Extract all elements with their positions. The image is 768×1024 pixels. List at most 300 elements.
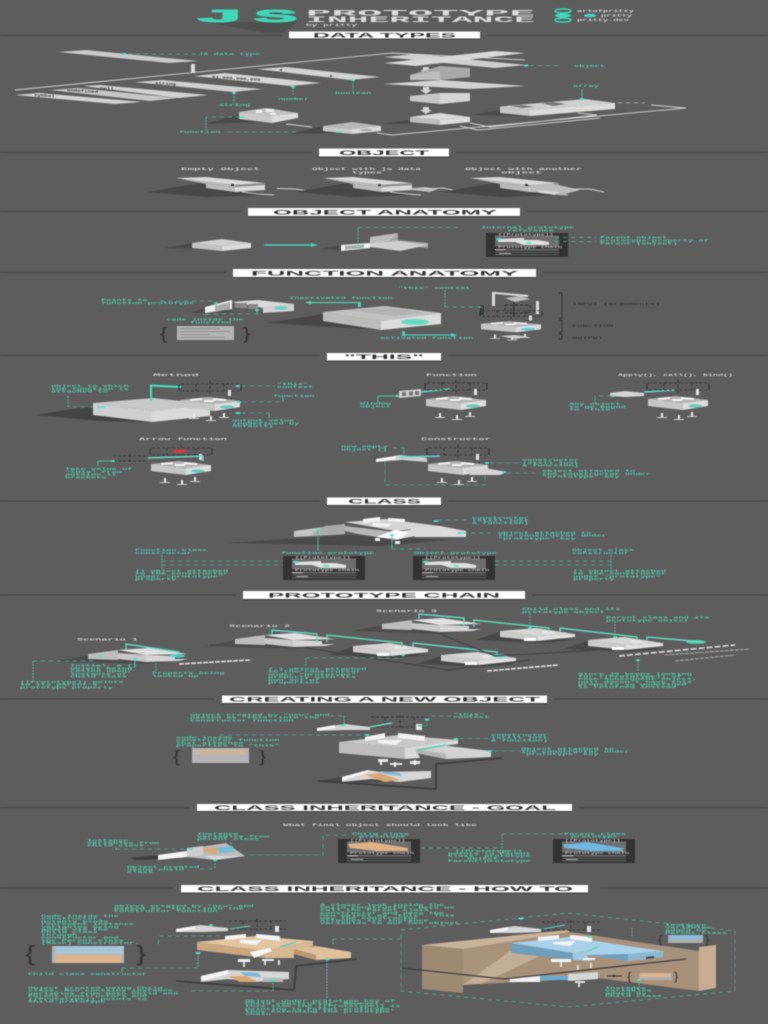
label: points to prototype: function.prototype bbox=[101, 301, 194, 305]
arrow bbox=[264, 243, 318, 247]
section heading: class inheritance how to bbox=[0, 885, 768, 893]
function box bbox=[179, 108, 335, 134]
labels: object attached to bbox=[542, 469, 635, 473]
output squiggle bbox=[487, 665, 558, 671]
social handles bbox=[555, 9, 634, 22]
labels: constructor bbox=[522, 458, 579, 462]
class diagram bbox=[225, 517, 466, 551]
label: code inside constructor: Code inside the bbox=[41, 914, 119, 918]
labels: the constructor under bbox=[542, 472, 651, 476]
label: object created using child: [[Prototype]] points to bbox=[28, 997, 147, 1001]
dark connector bbox=[402, 959, 686, 979]
label: take value bbox=[65, 460, 132, 479]
labels: "prototype" key bbox=[542, 474, 620, 479]
panel: parent prototype: Prototype chain bbox=[565, 851, 629, 855]
label: object class constructor: {} object attached bbox=[573, 569, 666, 573]
label: constructor: constructor bbox=[491, 733, 548, 737]
labels: called upon, bbox=[70, 669, 132, 673]
teal link bbox=[151, 386, 181, 401]
labels bbox=[522, 607, 710, 689]
label: object under prototype key: Child constructor. However, bbox=[245, 1001, 385, 1006]
label: closer look: call the Parent class' bbox=[320, 908, 434, 912]
labels: for [[Prototype]] of bbox=[578, 674, 682, 679]
label: object class constructor: under "prototype" bbox=[573, 574, 661, 578]
panel: object.prototype bbox=[413, 551, 497, 580]
label: take value: Take value of bbox=[65, 467, 132, 471]
label: {.} object attached bbox=[268, 667, 366, 671]
labels: default) bbox=[232, 424, 273, 428]
panel: this constructor bbox=[341, 437, 651, 485]
panel: object.prototype: Object.prototype bbox=[414, 551, 497, 555]
ground line bbox=[360, 630, 651, 656]
exploded function view bbox=[480, 292, 542, 340]
section heading: class inheritance how to: CLASS INHERITANCE - HOW TO bbox=[197, 886, 573, 893]
label: parent object bbox=[555, 235, 709, 246]
teal link bbox=[126, 644, 179, 655]
title: inheritance: INHERITANCE bbox=[306, 15, 535, 25]
label: parent instance variables: Instance bbox=[197, 832, 238, 836]
label: code inside constructor: notably binds bbox=[41, 919, 108, 923]
labels: child class bbox=[70, 674, 127, 679]
label: child instance variables: child class bbox=[87, 843, 144, 848]
section heading: object anatomy: OBJECT ANATOMY bbox=[273, 209, 499, 216]
label: object created using child: class. Now contains instance bbox=[28, 988, 173, 993]
code panel: } bbox=[136, 941, 146, 966]
labels: to its parent's bbox=[20, 682, 98, 687]
panel: creating a new object bbox=[173, 712, 630, 789]
label: activated function bbox=[380, 331, 473, 340]
label: code inside constructor: represent instance bbox=[41, 922, 134, 926]
label: any object: to "this" bbox=[569, 407, 616, 412]
panel: object.prototype: [[Prototype]] bbox=[425, 555, 481, 560]
array: array bbox=[573, 84, 599, 88]
labels: Initial, a {} bbox=[70, 663, 137, 668]
object and frame bbox=[317, 715, 430, 731]
plate: boolean bbox=[257, 67, 380, 95]
label: constructor: (still just bbox=[472, 518, 529, 523]
label: constructor: a function) bbox=[491, 738, 548, 742]
big object box bbox=[35, 398, 210, 422]
labels: output value bbox=[232, 418, 294, 423]
code panel: that attaches bbox=[176, 741, 243, 745]
panel: this apply call bind bbox=[569, 373, 733, 420]
panel: this function: Function bbox=[426, 373, 477, 378]
label: object attached: the constructor under bbox=[521, 749, 630, 754]
resulting object bbox=[316, 770, 431, 783]
section heading: class inheritance goal bbox=[0, 804, 768, 812]
label: object created: class bbox=[127, 870, 153, 874]
plate: number: $1,000,000,000 bbox=[212, 75, 260, 83]
label: object created bbox=[190, 713, 344, 724]
child code panel: added by bbox=[605, 991, 646, 995]
label: function class constructor bbox=[135, 548, 283, 581]
label: take value: outside it bbox=[65, 472, 117, 477]
label: object created bbox=[127, 860, 215, 874]
label: this context: "this" context bbox=[398, 286, 471, 290]
label: object attached: the constructor under bbox=[498, 533, 607, 538]
object with another object bbox=[441, 167, 604, 197]
panel: function.prototype: function.prototype bbox=[281, 551, 374, 555]
output squiggle bbox=[619, 645, 735, 656]
section heading: object bbox=[0, 148, 768, 157]
function box: function bbox=[179, 130, 220, 134]
label: object created using child: Child.prototype bbox=[28, 999, 106, 1004]
title: JS: S bbox=[254, 6, 297, 26]
panel: parent prototype: prototype bbox=[571, 834, 618, 839]
label: constructor: (still just bbox=[491, 735, 548, 740]
label: closer look: attaches its instance bbox=[320, 918, 429, 923]
label: any object: to be bound bbox=[569, 405, 626, 409]
label: function class constructor: constructor bbox=[135, 551, 192, 555]
labels: (undefined by bbox=[232, 421, 299, 425]
labels bbox=[20, 655, 225, 689]
label: code inside constructor: through bbox=[41, 933, 77, 937]
plate: boolean: boolean bbox=[335, 91, 371, 95]
resulting object bbox=[510, 972, 598, 987]
window object bbox=[399, 389, 421, 398]
label: under "prototype" bbox=[268, 672, 356, 676]
label: internal prototype reference: reference bbox=[507, 228, 554, 232]
label: closer look: way the constructor bbox=[320, 916, 418, 920]
section heading: class inheritance goal: CLASS INHERITANCE - GOAL bbox=[214, 805, 556, 812]
labels: context bbox=[277, 385, 313, 389]
social handles: artofpritty bbox=[577, 9, 634, 13]
labels: Parent class and its bbox=[606, 615, 710, 620]
label: constructor: a function) bbox=[472, 521, 529, 525]
plate: undefined: undefined bbox=[67, 88, 98, 94]
label: function class constructor: to the constructor bbox=[135, 571, 228, 576]
labels: [[Prototype]] points bbox=[20, 680, 124, 684]
labels: (still just bbox=[522, 461, 579, 465]
bracket labels: input function output: OUTPUT bbox=[572, 336, 603, 340]
inactive function box bbox=[290, 122, 381, 134]
panel: class inheritance goal bbox=[87, 823, 635, 874]
label: closer look: variables to our new object bbox=[320, 921, 460, 925]
plate: symbol: symbol bbox=[34, 93, 55, 99]
label: closer look: constructor and pass the bbox=[320, 911, 444, 915]
label: object created using child: variables from both Child and bbox=[28, 991, 178, 995]
plate: undefined bbox=[50, 88, 178, 101]
code panel: { bbox=[25, 941, 35, 966]
panel: child prototype: prototype bbox=[359, 834, 406, 839]
panel: parent prototype bbox=[553, 832, 635, 863]
section heading: this: "THIS" bbox=[344, 354, 424, 361]
labels: a function) bbox=[522, 463, 579, 468]
label: object under prototype key: thus extending the prototype bbox=[245, 1009, 390, 1013]
social handles: pritty.dev bbox=[577, 18, 629, 22]
label: any object bbox=[569, 395, 626, 412]
constructor box bbox=[339, 733, 492, 767]
section heading: object: OBJECT bbox=[339, 150, 429, 157]
labels: each subsequent object, bbox=[578, 677, 697, 681]
label: points to prototype bbox=[101, 298, 214, 305]
zoom outline bbox=[401, 913, 735, 1007]
object with another object: object bbox=[501, 170, 542, 176]
label: object created: object created by "new" and bbox=[190, 713, 330, 717]
plate: string: string bbox=[219, 103, 250, 107]
title: JS: J bbox=[198, 6, 241, 26]
code panel: { bbox=[173, 747, 181, 766]
label: object attached: Object attached to bbox=[521, 747, 614, 751]
loop connector lines bbox=[377, 105, 686, 135]
social handles: pritty bbox=[601, 13, 632, 18]
label: code inside constructor: the Parent class bbox=[41, 938, 124, 942]
panel: scenario 2 bbox=[205, 624, 558, 684]
label: prototype points to parent: points to Parent bbox=[448, 851, 531, 856]
object with js data types: Object with js data bbox=[312, 167, 423, 172]
label bbox=[268, 654, 405, 684]
label: function class constructor: property bbox=[135, 577, 176, 581]
large function box bbox=[265, 306, 441, 330]
plate: js data type bbox=[58, 50, 260, 73]
code panel: code inside the bbox=[166, 317, 244, 322]
label: object class constructor bbox=[495, 548, 666, 581]
label: constructor bbox=[438, 516, 529, 525]
panel: this arrow function: Arrow function bbox=[139, 437, 227, 442]
label: object created by new: object created by "new" and bbox=[114, 904, 254, 908]
inactive exploded function bbox=[190, 300, 294, 314]
label: closer look: A closer look inside the bbox=[320, 903, 444, 907]
section heading: class bbox=[0, 498, 768, 506]
frame and object bbox=[490, 920, 600, 933]
label: object attached: "prototype" key bbox=[498, 536, 576, 540]
byline: by pritty bbox=[306, 23, 358, 28]
connector dashes bbox=[250, 835, 350, 855]
label: object class constructor: constructor bbox=[572, 551, 629, 555]
panel: prototype chain: [[Prototype]] bbox=[498, 232, 554, 237]
label: parent instance variables bbox=[197, 832, 270, 850]
child code panel: Child class bbox=[605, 994, 662, 998]
code panel: code inside bbox=[176, 735, 233, 740]
label: child instance variables bbox=[87, 838, 187, 850]
panel: this arrow function bbox=[65, 437, 227, 485]
label: object class constructor: to the constructor bbox=[573, 571, 666, 576]
panel: scenario 1: Scenario 1 bbox=[77, 638, 138, 642]
label: internal prototype reference: Internal prototype bbox=[481, 225, 574, 230]
plate: string bbox=[135, 80, 262, 107]
label: parent object: Parent object bbox=[600, 235, 667, 240]
label: to the constructor bbox=[268, 669, 361, 674]
panel: how to zoomed constructor bbox=[320, 903, 735, 1007]
label: constructor: constructor bbox=[472, 516, 529, 520]
label: object created: Object created bbox=[127, 865, 200, 869]
labels: object to which bbox=[51, 384, 129, 388]
panel: data types diagram bbox=[15, 50, 686, 135]
parent code panel bbox=[632, 923, 727, 946]
blue constructor box bbox=[511, 935, 663, 970]
label: code inside constructor: added via the bbox=[41, 927, 108, 932]
code panel: } bbox=[243, 324, 251, 343]
label: object class constructor: property bbox=[573, 577, 614, 581]
label: take value: "this" from bbox=[65, 470, 122, 474]
label: object attached bbox=[463, 531, 607, 540]
label: inactivated function bbox=[289, 296, 393, 307]
labels: new empty bbox=[341, 444, 388, 449]
label: object under prototype key: this time the [[Prototype]] is bbox=[245, 1004, 400, 1008]
labels bbox=[51, 382, 314, 428]
label: prototype points to parent: Parent.prototype bbox=[448, 859, 531, 863]
panel: object variants bbox=[147, 167, 604, 197]
frame and object bbox=[176, 919, 286, 932]
panel: child prototype: Prototype chain bbox=[350, 851, 414, 855]
label: activated function: activated function bbox=[380, 336, 473, 340]
panel: function anatomy bbox=[101, 286, 660, 343]
section heading: function anatomy: FUNCTION ANATOMY bbox=[251, 270, 520, 277]
labels: instance of bbox=[70, 672, 127, 676]
section heading: data types bbox=[0, 32, 768, 39]
bracket labels: input function output: FUNCTION bbox=[572, 324, 613, 328]
plate: symbol bbox=[15, 93, 142, 104]
label: object created: constructor function bbox=[190, 718, 294, 722]
label: parent instance variables: parent class bbox=[197, 837, 259, 841]
panel: child prototype: Child class bbox=[352, 832, 409, 836]
code panel bbox=[25, 936, 220, 976]
label: code inside constructor: constructor, bbox=[41, 916, 103, 921]
label: constructor bbox=[460, 733, 548, 742]
label: child instance variables: variables from bbox=[87, 841, 160, 845]
label: parent instance variables: variables from bbox=[197, 834, 270, 839]
label: object created: using child bbox=[127, 867, 184, 872]
output squiggle bbox=[179, 660, 250, 664]
label: object attached: "prototype" key bbox=[521, 752, 599, 756]
label: object created using child: Object created using Child bbox=[28, 986, 163, 990]
object stack bbox=[380, 51, 605, 125]
object with js data types bbox=[294, 167, 457, 197]
code panel: constructor function bbox=[176, 738, 280, 742]
label: closer look: new object as "this". This bbox=[320, 913, 455, 917]
array bbox=[470, 84, 645, 116]
ground line bbox=[210, 645, 529, 670]
object with js data types: types bbox=[352, 172, 382, 176]
header: title bbox=[198, 6, 634, 33]
label: window object bbox=[360, 395, 399, 408]
labels: property so undefined bbox=[578, 682, 687, 686]
panel: parent prototype: [[Prototype]] bbox=[565, 838, 621, 843]
label: code inside constructor: Child class bbox=[41, 930, 98, 934]
labels: attached to bbox=[51, 389, 108, 394]
label: code inside constructor: (Base) constructor. bbox=[41, 941, 139, 945]
label: prototype points to parent: object bbox=[467, 856, 498, 861]
section heading: creating a new object: CREATING A NEW OBJECT bbox=[229, 697, 540, 704]
labels: object being bbox=[70, 666, 132, 670]
label: this context: context bbox=[453, 715, 489, 719]
dark connector bbox=[318, 758, 502, 789]
labels: prototype property bbox=[20, 685, 113, 689]
code panel: } bbox=[259, 747, 267, 766]
plate: string: string bbox=[155, 81, 176, 87]
label: this context bbox=[431, 712, 489, 719]
code panel bbox=[173, 735, 367, 766]
label: object attached: object attached to bbox=[498, 531, 591, 535]
label: window object: object bbox=[360, 404, 391, 408]
panel: scenario 3 bbox=[352, 607, 750, 689]
label: window object: Window bbox=[360, 401, 391, 406]
panel: object anatomy bbox=[165, 225, 709, 257]
object box bbox=[165, 239, 251, 251]
connector lines bbox=[15, 53, 525, 90]
plate: number bbox=[194, 73, 321, 101]
exploded object bbox=[320, 228, 462, 251]
child code panel bbox=[605, 970, 678, 998]
panel: function.prototype: Prototype chain bbox=[295, 568, 359, 572]
labels bbox=[341, 444, 651, 485]
labels: Since JS keeps looking bbox=[578, 672, 692, 676]
label: function class constructor: Function class bbox=[135, 548, 208, 552]
plate: number: number bbox=[278, 97, 309, 101]
label: object under prototype key bbox=[245, 960, 400, 1016]
label: object under prototype key: pointing to Parent.prototype, bbox=[245, 1007, 395, 1011]
label: object created by new: constructor function bbox=[114, 909, 218, 913]
panel: function.prototype: [[Prototype]] bbox=[295, 555, 351, 560]
plate: null: null bbox=[100, 86, 114, 91]
any object bbox=[610, 391, 644, 397]
empty object bbox=[147, 167, 308, 197]
labels: "this" bbox=[277, 382, 308, 386]
labels: the function is bbox=[51, 387, 129, 391]
labels: function bbox=[273, 394, 314, 398]
red marker bbox=[174, 450, 186, 453]
labels: prototype object bbox=[606, 618, 689, 622]
empty object bbox=[376, 455, 427, 462]
label: child instance variables: Instance bbox=[87, 838, 128, 843]
child code panel: } bbox=[674, 970, 678, 983]
teal links bbox=[419, 614, 703, 642]
labels: Child class and its bbox=[522, 607, 620, 611]
label: object class constructor: Object class bbox=[572, 548, 634, 552]
label: this context bbox=[398, 286, 483, 308]
label: code inside constructor: constructor and bbox=[41, 935, 119, 940]
panel: function.prototype bbox=[281, 551, 374, 580]
label: take value: brackets bbox=[65, 475, 106, 479]
object stack: object bbox=[574, 64, 605, 68]
label: object under prototype key: Object under prototype key of bbox=[245, 999, 395, 1003]
code panel: { bbox=[160, 324, 168, 343]
label: prototype points to parent: [[Prototype]] bbox=[455, 849, 522, 853]
section heading: function anatomy bbox=[0, 269, 768, 277]
labels: prototype object bbox=[522, 610, 605, 614]
label: object created: passed as "this" into the bbox=[190, 715, 319, 720]
labels: object {} bbox=[341, 447, 388, 451]
panel: how to left bbox=[25, 904, 400, 1016]
empty object: Empty Object bbox=[181, 167, 260, 172]
label: inactivated function: Inactivated function bbox=[289, 296, 393, 300]
label: any object: Any object bbox=[569, 402, 621, 406]
resulting object bbox=[201, 970, 289, 982]
label: function class constructor: {} object attached bbox=[135, 569, 228, 573]
title: JS bbox=[198, 6, 297, 26]
bracket labels: input function output: INPUT (arguments) bbox=[572, 302, 660, 306]
section heading: class: CLASS bbox=[348, 499, 423, 506]
panel: this function bbox=[360, 373, 487, 420]
parent code panel: } bbox=[705, 933, 709, 946]
object with another object: Object with another bbox=[465, 167, 582, 172]
label: object created using child bbox=[28, 979, 276, 1004]
child code panel: variables bbox=[605, 988, 652, 993]
label: parent object: prototype property of bbox=[600, 238, 709, 243]
child code panel: Instance bbox=[605, 986, 646, 990]
code panel: function bbox=[190, 320, 231, 324]
label: object attached bbox=[494, 747, 630, 756]
labels: is returned instead bbox=[578, 685, 676, 689]
subtitle: What final object should look like bbox=[283, 823, 477, 828]
parent code panel: Parent class bbox=[665, 931, 727, 935]
goal object bbox=[130, 843, 245, 861]
panel: this method bbox=[35, 373, 314, 428]
parent code panel: { bbox=[658, 933, 662, 946]
label: code inside constructor: variables being bbox=[41, 925, 119, 929]
label: this context: "this" bbox=[453, 712, 484, 717]
panel: this method: Method bbox=[153, 373, 199, 378]
